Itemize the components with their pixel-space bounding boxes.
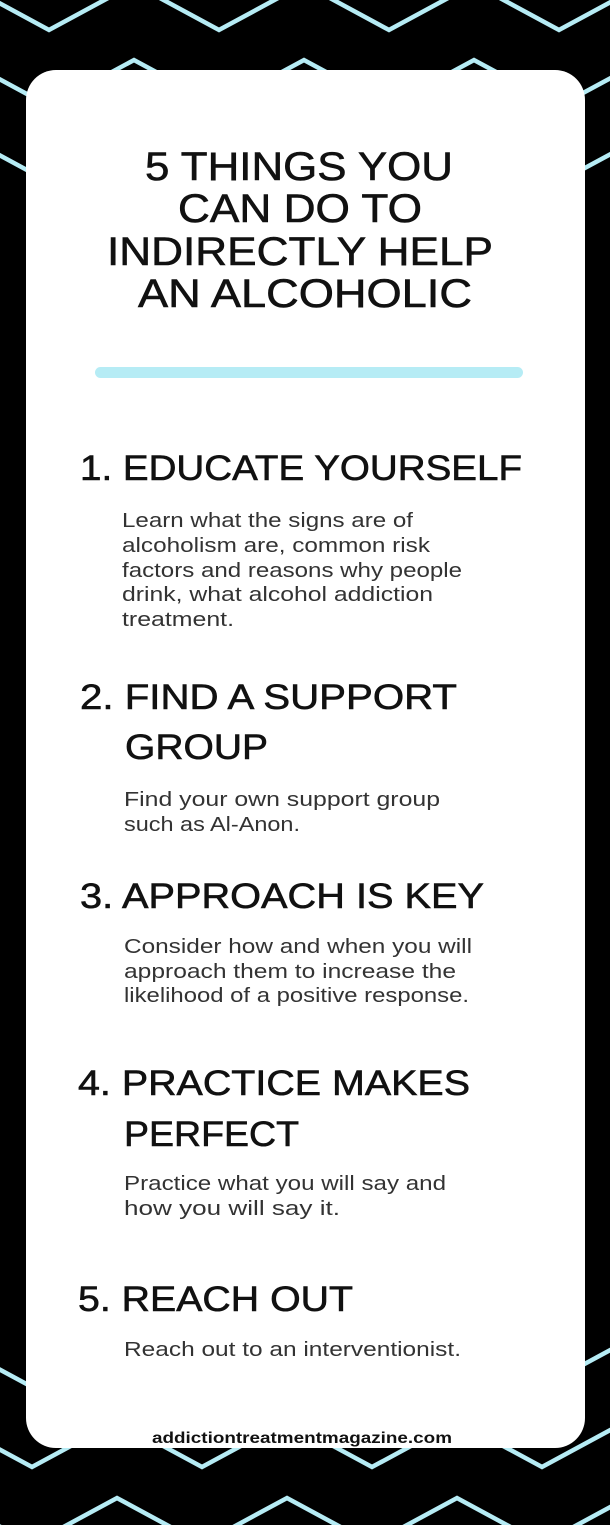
section 3: approach is key: 3. APPROACH IS KEY <box>80 877 484 916</box>
section 1: educate yourself <box>80 449 522 631</box>
section 2: find a support group: GROUP <box>125 728 268 767</box>
section 4: practice makes perfect <box>78 1064 470 1220</box>
section 2: find a support group: such as Al-Anon. <box>124 814 300 836</box>
section 1: educate yourself: Learn what the signs are of <box>122 510 414 532</box>
section 4: practice makes perfect: PERFECT <box>124 1115 299 1154</box>
section 3: approach is key: Consider how and when you will <box>124 936 472 958</box>
title <box>107 145 493 316</box>
section 5: reach out: 5. REACH OUT <box>78 1280 353 1319</box>
section 1: educate yourself: factors and reasons why people <box>122 560 462 582</box>
title: AN ALCOHOLIC <box>138 272 472 316</box>
section 1: educate yourself: treatment. <box>122 609 234 631</box>
section 5: reach out <box>78 1280 461 1361</box>
section 1: educate yourself: drink, what alcohol addiction <box>122 584 433 606</box>
section 1: educate yourself: 1. EDUCATE YOURSELF <box>80 449 522 488</box>
title: CAN DO TO <box>178 187 422 231</box>
section 4: practice makes perfect: Practice what you will say and <box>124 1173 446 1195</box>
section 3: approach is key: likelihood of a positive response. <box>124 985 469 1007</box>
section 5: reach out: Reach out to an interventionist. <box>124 1339 461 1361</box>
title: 5 THINGS YOU <box>145 145 453 189</box>
section 4: practice makes perfect: 4. PRACTICE MAKES <box>78 1064 470 1103</box>
section 1: educate yourself: alcoholism are, common risk <box>122 535 431 557</box>
divider bar <box>95 367 523 378</box>
title: INDIRECTLY HELP <box>107 230 493 274</box>
section 2: find a support group: Find your own support group <box>124 789 440 811</box>
section 4: practice makes perfect: how you will say it. <box>124 1198 340 1220</box>
section 2: find a support group: 2. FIND A SUPPORT <box>80 678 457 717</box>
section 3: approach is key <box>80 877 484 1007</box>
section 3: approach is key: approach them to increase the <box>124 961 456 983</box>
footer website: addictiontreatmentmagazine.com <box>152 1430 452 1447</box>
section 2: find a support group <box>80 678 457 836</box>
